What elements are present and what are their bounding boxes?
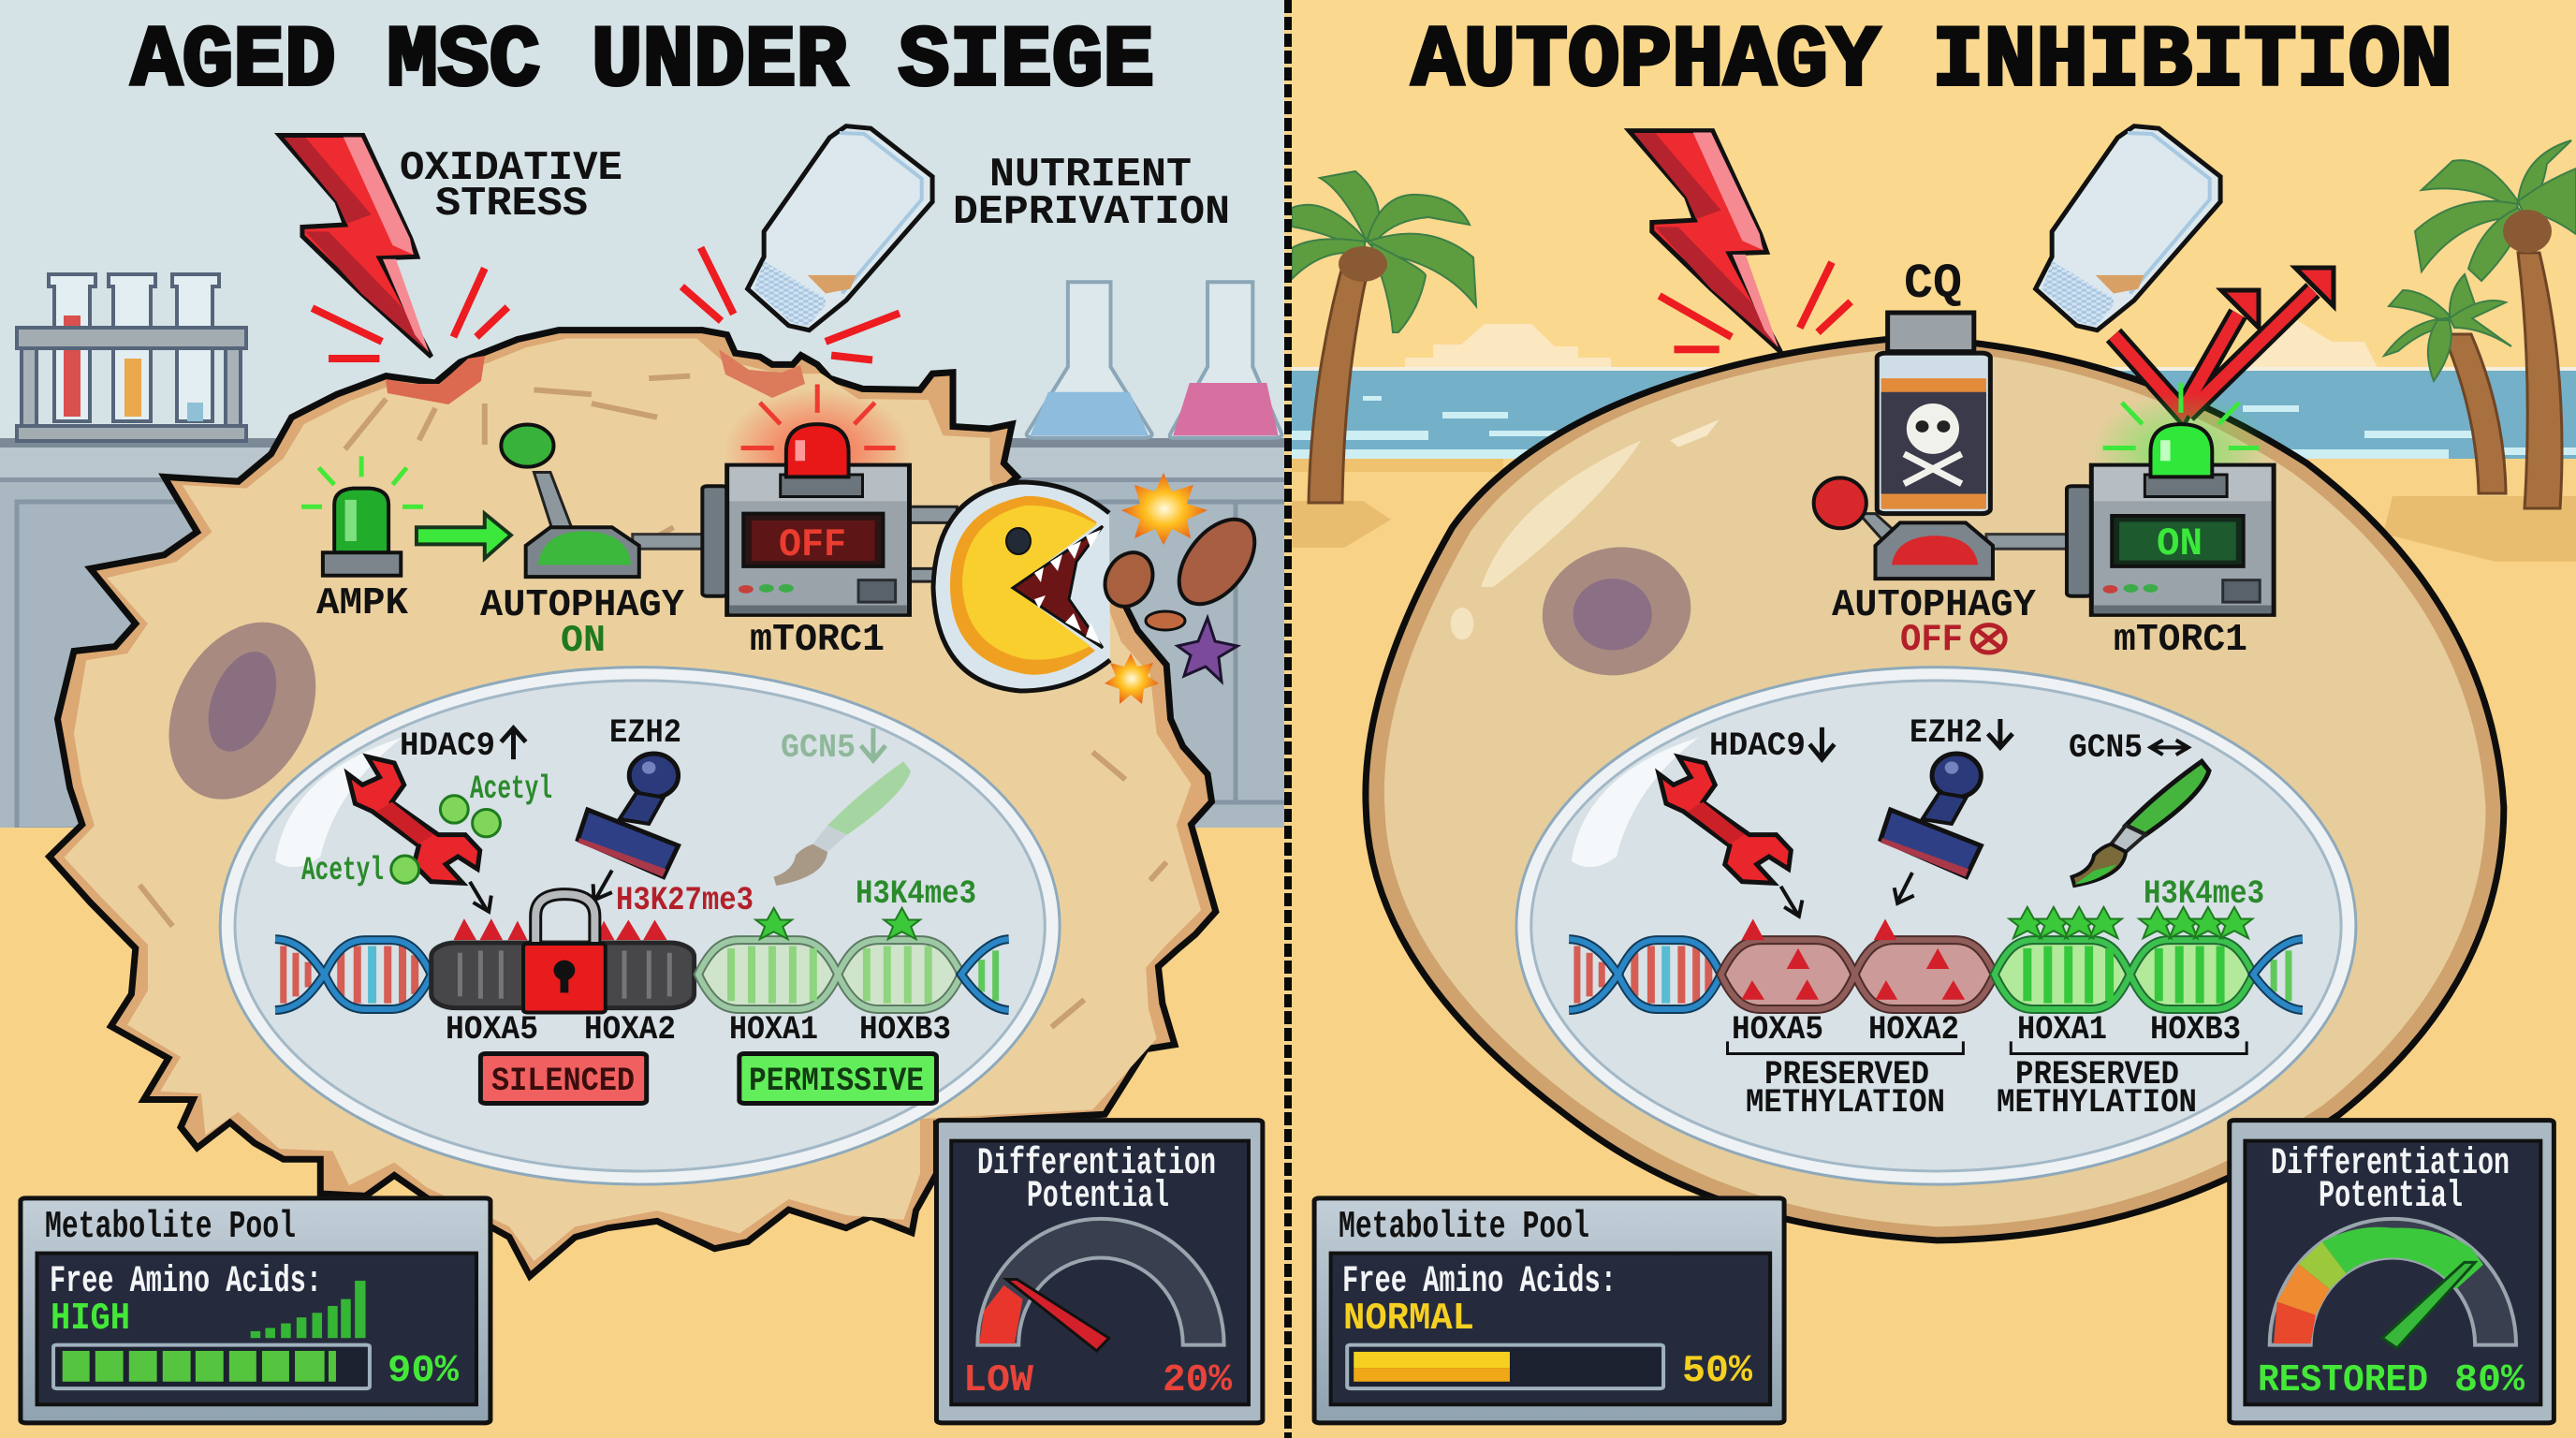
test tube rack (17, 274, 246, 441)
label: GCN5 steady: GCN5 (2069, 729, 2143, 767)
label: oxidative stress: OXIDATIVE (400, 145, 622, 192)
cell: healthy round membrane (1366, 337, 2504, 1240)
panel: metabolite pool: Free Amino Acids: (1342, 1261, 1617, 1303)
lightning bolt (1629, 131, 1781, 352)
panel: metabolite pool: HIGH (51, 1298, 130, 1341)
pac-man autophagosome (933, 482, 1110, 691)
label: AMPK: AMPK (316, 582, 408, 625)
panel: differentiation potential restored: RESTORED (2258, 1359, 2428, 1402)
label: autophagy off: OFF (1900, 619, 1963, 662)
label: autophagy on: AUTOPHAGY (480, 584, 684, 627)
stamp: EZH2 (578, 754, 679, 877)
panel: differentiation potential low: Differentiation (977, 1143, 1216, 1185)
panel: metabolite pool (1314, 1198, 1784, 1423)
label: ON display: ON (2157, 521, 2203, 566)
H3K4me3 stars (755, 908, 920, 939)
icon: padlock (523, 894, 606, 1012)
red up arrows: rising mTORC1 (2114, 268, 2334, 414)
label: autophagy off (1832, 584, 2036, 662)
H3K4me3 stars (2010, 907, 2252, 938)
CQ drug bottle (1877, 313, 1990, 514)
gene labels: HOXA1 (2017, 1011, 2107, 1049)
label: OFF display: OFF (779, 522, 846, 567)
panel: metabolite pool: 90% (388, 1350, 459, 1393)
panel: differentiation potential restored (2230, 1121, 2554, 1423)
panel: differentiation potential low (936, 1121, 1263, 1423)
label: preserved methylation left (1746, 1056, 1945, 1122)
panel: differentiation potential low: LOW (963, 1359, 1033, 1402)
label: autophagy on (480, 584, 684, 663)
gauge: low (977, 1219, 1224, 1351)
methyl marks (1741, 919, 1965, 1000)
acetyl groups (391, 796, 500, 883)
label: mTORC1: mTORC1 (2114, 619, 2247, 662)
nucleus: glass envelope (220, 668, 1060, 1184)
empty bottle: nutrient deprivation (748, 126, 932, 330)
label: EZH2: EZH2 (609, 714, 681, 752)
arrows to DNA (1781, 873, 1914, 917)
panel: differentiation potential low: Potential (1027, 1176, 1169, 1218)
panel: differentiation potential low: 20% (1163, 1359, 1232, 1402)
label: acetyl: Acetyl (470, 770, 552, 808)
signal bars (251, 1281, 366, 1338)
panel: metabolite pool (21, 1198, 490, 1423)
lightning bolt: oxidative stress (279, 135, 432, 357)
gene labels: HOXB3 (2150, 1011, 2241, 1049)
panel: metabolite pool: Metabolite Pool (45, 1206, 296, 1249)
progress bar: 50 percent (1347, 1345, 1663, 1388)
empty bottle (2036, 126, 2220, 330)
palm tree far right (2415, 140, 2576, 508)
damage patches on membrane (386, 349, 805, 404)
badge: silenced: SILENCED (491, 1063, 635, 1100)
label: CQ: CQ (1904, 257, 1962, 312)
faded brush: GCN5 (774, 761, 911, 886)
nucleus: glass envelope (1516, 668, 2356, 1184)
DNA helix: silenced and permissive (275, 939, 1009, 1010)
arrow: AMPK to autophagy (417, 514, 511, 559)
label: acetyl: Acetyl (301, 852, 384, 889)
panel: autophagy inhibition (1288, 0, 2576, 1438)
icon: autophagy lever off (1814, 477, 2070, 579)
icon: autophagy lever on (501, 425, 707, 577)
progress bar: 90 percent (53, 1345, 370, 1388)
label: HDAC9 up: HDAC9 (400, 727, 495, 765)
title: aged MSC under siege: AGED MSC UNDER SIEGE (131, 12, 1154, 110)
badge: permissive: PERMISSIVE (749, 1063, 924, 1100)
cell: damaged jagged membrane (50, 330, 1216, 1276)
explosions (1105, 473, 1208, 704)
label: GCN5 steady (2069, 729, 2188, 767)
label: autophagy on: ON (561, 620, 606, 663)
gene labels: HOXA5 (446, 1011, 538, 1049)
beach background (1288, 0, 2576, 1438)
gene labels: HOXA5 (1732, 1011, 1823, 1049)
cell nucleolus (1535, 544, 1698, 678)
label: preserved methylation left: METHYLATION (1746, 1084, 1945, 1122)
arrows to DNA (470, 871, 612, 912)
brackets (1728, 1041, 2247, 1054)
panel: metabolite pool: NORMAL (1343, 1298, 1474, 1341)
methyl spikes (453, 918, 667, 940)
machine: mTORC1 off (702, 384, 957, 614)
icon: AMPK green beacon (301, 456, 423, 576)
label: oxidative stress: STRESS (435, 181, 588, 227)
label: H3K27me3: H3K27me3 (616, 882, 754, 919)
label: oxidative stress (400, 145, 622, 227)
DNA helix: preserved (1569, 939, 2303, 1010)
wrench: HDAC9 (1659, 756, 1791, 883)
stamp: EZH2 (1881, 754, 1981, 877)
gene labels: HOXB3 (859, 1011, 951, 1049)
badge: permissive (739, 1054, 936, 1103)
label: GCN5 down: GCN5 (781, 729, 856, 767)
impact sparks: bottle (681, 247, 900, 360)
lab background (0, 0, 1288, 1438)
label: HDAC9 down: HDAC9 (1709, 727, 1806, 765)
label: preserved methylation right: PRESERVED (2015, 1056, 2179, 1093)
gauge: restored (2270, 1219, 2516, 1348)
label: nutrient deprivation (953, 152, 1230, 236)
gene labels: HOXA2 (584, 1011, 676, 1049)
label: nutrient deprivation: DEPRIVATION (953, 189, 1230, 236)
title: autophagy inhibition: AUTOPHAGY INHIBITION (1412, 12, 2452, 110)
label: preserved methylation right: METHYLATION (1997, 1084, 2197, 1122)
gene labels (446, 1011, 951, 1049)
label: preserved methylation left: PRESERVED (1764, 1056, 1929, 1093)
badge: silenced (480, 1054, 647, 1103)
brush: GCN5 (2072, 761, 2209, 886)
panel: differentiation potential restored: Potential (2319, 1176, 2463, 1218)
cell nucleolus (148, 616, 336, 805)
label: nutrient deprivation: NUTRIENT (989, 152, 1192, 198)
label: H3K4me3: H3K4me3 (856, 875, 976, 913)
panel: metabolite pool: 50% (1682, 1350, 1752, 1393)
label: preserved methylation right (1997, 1056, 2197, 1122)
lab flasks (1027, 282, 1281, 438)
palm tree left (1292, 171, 1476, 503)
gene labels: HOXA2 (1868, 1011, 1959, 1049)
debris: damaged organelles (1096, 506, 1269, 682)
label: acetyl (301, 770, 552, 889)
gene labels (1732, 1011, 2241, 1049)
label: H3K4me3: H3K4me3 (2144, 875, 2264, 913)
machine: mTORC1 on (2067, 383, 2274, 614)
panel: aged MSC under siege (0, 0, 1288, 1438)
gene labels: HOXA1 (729, 1011, 818, 1049)
impact sparks (1660, 262, 1851, 349)
panel: metabolite pool: Free Amino Acids: (50, 1261, 322, 1303)
panel: differentiation potential restored: 80% (2454, 1359, 2525, 1402)
impact sparks: bolt (312, 269, 507, 359)
panel: metabolite pool: Metabolite Pool (1339, 1206, 1589, 1249)
label: EZH2 down: EZH2 (1910, 714, 1983, 752)
label: autophagy off: AUTOPHAGY (1832, 584, 2036, 627)
palm tree small (2384, 274, 2511, 493)
label: mTORC1: mTORC1 (750, 619, 885, 662)
wrench: HDAC9 (348, 756, 480, 883)
